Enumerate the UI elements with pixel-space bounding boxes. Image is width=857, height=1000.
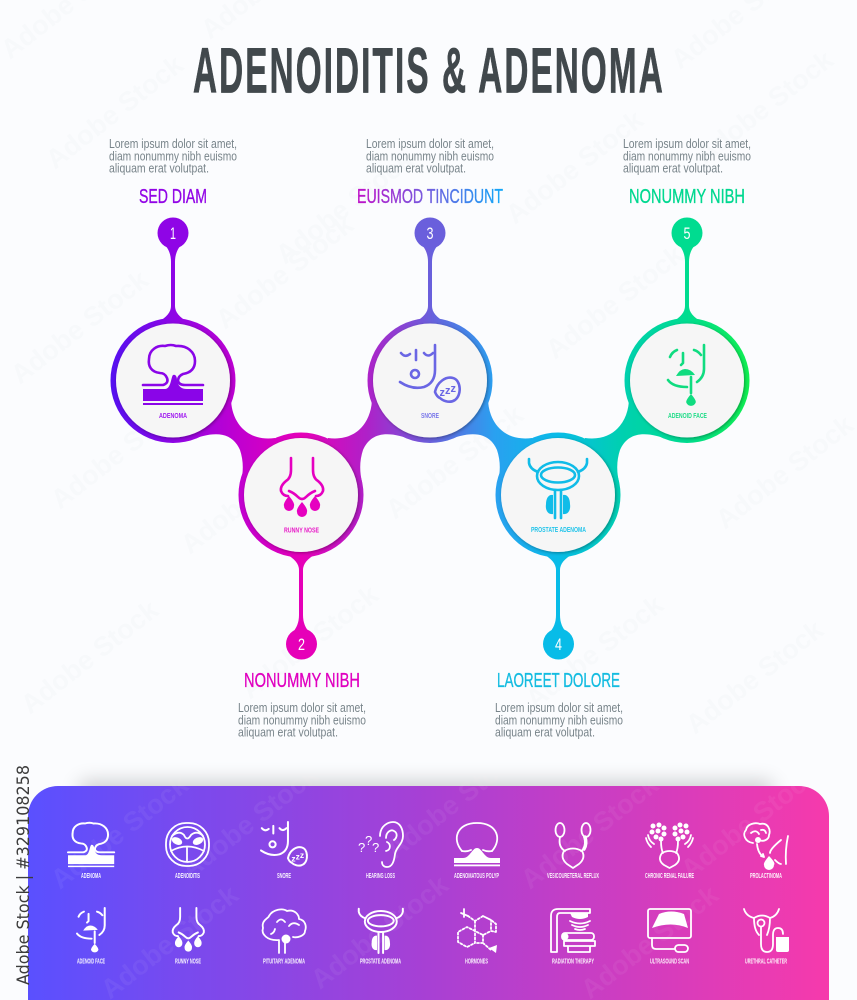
icon: runny nose <box>173 908 204 952</box>
panel: icon set <box>28 786 829 1000</box>
watermark on page: Adobe Stock <box>500 104 650 230</box>
pin 4 <box>543 628 574 660</box>
icon: urethral catheter <box>744 909 789 952</box>
text block 5: Lorem ipsum dolor sit amet, <box>623 136 751 151</box>
step 3: snore <box>373 324 487 438</box>
text block 1: Lorem ipsum dolor sit amet, <box>109 136 237 151</box>
icon: adenoiditis <box>166 823 209 866</box>
watermark on page: Adobe Stock <box>175 434 325 560</box>
icon: radiation therapy <box>551 909 595 952</box>
watermark on panel: Adobe Stock <box>380 739 530 865</box>
watermark on page: Adobe Stock <box>45 389 195 515</box>
pin 4: 4 <box>555 635 562 654</box>
label: snore: SNORE <box>277 873 291 880</box>
icon: prostate adenoma <box>359 909 403 953</box>
text block 2: diam nonummy nibh euismo <box>238 712 366 728</box>
icon: hearing loss: ? <box>358 840 365 855</box>
label: prolactinoma: PROLACTINOMA <box>750 873 782 880</box>
text block 3: diam nonummy nibh euismo <box>366 148 494 164</box>
text block 3: Lorem ipsum dolor sit amet, <box>366 136 494 151</box>
label: ultrasound scan: ULTRASOUND SCAN <box>650 958 689 966</box>
icon: chronic renal failure <box>646 822 693 868</box>
icon: adenoma <box>68 823 114 867</box>
stock id text: Adobe Stock | #329108258 <box>14 765 34 985</box>
icon: ultrasound scan <box>648 909 691 952</box>
text block 4: aliquam erat volutpat. <box>495 724 595 740</box>
text block 2 <box>238 700 366 740</box>
label: adenoma: ADENOMA <box>81 873 101 880</box>
circle <box>373 324 487 438</box>
icon: snore <box>261 822 307 866</box>
watermark on page: Adobe Stock <box>210 209 360 335</box>
step 5: adenoid face <box>630 324 744 438</box>
text block 5 <box>623 136 751 176</box>
icon: adenoid face <box>77 908 105 952</box>
step 1: adenoma <box>116 324 230 438</box>
pin 3 <box>414 218 446 248</box>
pin 3: 3 <box>426 224 434 243</box>
text block 4: Lorem ipsum dolor sit amet, <box>495 700 623 715</box>
heading 3: EUISMOD TINCIDUNT <box>357 186 503 208</box>
watermark on panel: Adobe Stock <box>675 759 825 885</box>
watermark on page: Adobe Stock <box>680 614 830 740</box>
watermark on page: Adobe Stock <box>710 409 857 535</box>
label: RUNNY NOSE <box>284 526 319 534</box>
watermark on panel: Adobe Stock <box>305 869 455 995</box>
watermark on page: Adobe Stock <box>15 594 165 720</box>
text block 2: Lorem ipsum dolor sit amet, <box>238 700 366 715</box>
watermark on panel: Adobe Stock <box>175 759 325 885</box>
label: runny nose: RUNNY NOSE <box>175 958 201 966</box>
watermark on page: Adobe Stock <box>540 239 690 365</box>
label: chronic renal failure: CHRONIC RENAL FAILURE <box>645 873 694 880</box>
timeline ribbon <box>110 244 750 633</box>
watermark on page: Adobe Stock <box>690 44 840 170</box>
text block 3 <box>366 136 494 176</box>
watermark on page: Adobe Stock <box>40 49 190 175</box>
label: ADENOMA <box>159 411 187 420</box>
watermark on page: Adobe Stock <box>520 589 670 715</box>
label: adenoiditis: ADENOIDITIS <box>175 873 200 880</box>
watermark on page: Adobe Stock <box>270 144 420 270</box>
pin 1 <box>158 218 188 248</box>
step 4: prostate adenoma <box>501 438 615 552</box>
watermark on panel: Adobe Stock <box>515 769 665 895</box>
watermark on panel <box>45 739 825 1000</box>
label: adenomatous polyp: ADENOMATOUS POLYP <box>454 873 499 880</box>
watermark on page: Adobe Stock <box>380 399 530 525</box>
heading 1: SED DIAM <box>139 186 207 208</box>
watermark on page <box>0 0 857 740</box>
circle <box>630 324 744 438</box>
text block 5: diam nonummy nibh euismo <box>623 148 751 164</box>
icon: hearing loss: ? <box>372 840 379 855</box>
text block 1: diam nonummy nibh euismo <box>109 148 237 164</box>
text block 2: aliquam erat volutpat. <box>238 724 338 740</box>
icon: hearing loss <box>358 822 403 867</box>
label: hearing loss: HEARING LOSS <box>366 873 395 880</box>
circle <box>244 438 358 552</box>
text block 5: aliquam erat volutpat. <box>623 160 723 176</box>
pin 2: 2 <box>298 635 305 654</box>
icon: adenomatous polyp <box>454 823 500 866</box>
label: urethral catheter: URETHRAL CATHETER <box>745 958 787 966</box>
heading 2: NONUMMY NIBH <box>244 670 360 692</box>
pin 5: 5 <box>684 224 690 243</box>
title: ADENOIDITIS & ADENOMA <box>193 35 665 106</box>
icon: prolactinoma <box>744 823 788 870</box>
panel background <box>28 786 829 1000</box>
icon: runny nose <box>281 458 323 517</box>
icon: snore <box>400 345 460 402</box>
label: PROSTATE ADENOMA <box>531 525 586 534</box>
label: prostate adenoma: PROSTATE ADENOMA <box>360 958 401 966</box>
text block 1: aliquam erat volutpat. <box>109 160 209 176</box>
heading 5: NONUMMY NIBH <box>629 186 745 208</box>
label: ADENOID FACE <box>668 411 707 420</box>
text block 1 <box>109 136 237 176</box>
label: pituitary adenoma: PITUITARY ADENOMA <box>263 958 305 966</box>
watermark on page: Adobe Stock <box>5 264 155 390</box>
text block 3: aliquam erat volutpat. <box>366 160 466 176</box>
label: adenoid face: ADENOID FACE <box>77 958 105 966</box>
heading 4: LAOREET DOLORE <box>497 670 620 692</box>
icon: adenoid face <box>668 345 704 406</box>
panel shadow <box>80 782 772 806</box>
icon: prostate <box>529 459 587 518</box>
circle <box>116 324 230 438</box>
watermark on page: Adobe Stock <box>235 579 385 705</box>
pin 2 <box>286 628 317 660</box>
icon: vesicoureteral reflux <box>556 823 590 868</box>
icon: adenoma <box>143 345 203 405</box>
icon: pituitary adenoma <box>263 909 306 953</box>
label: hormones: HORMONES <box>465 958 488 966</box>
watermark on panel: Adobe Stock <box>45 769 195 895</box>
icon: hearing loss: ? <box>365 833 372 848</box>
circle <box>501 438 615 552</box>
text block 4: diam nonummy nibh euismo <box>495 712 623 728</box>
text block 4 <box>495 700 623 740</box>
pin 1: 1 <box>170 224 176 243</box>
step 2: runny nose <box>244 438 358 552</box>
icon: hormones <box>458 909 497 953</box>
pin 5 <box>672 218 702 248</box>
label: radiation therapy: RADIATION THERAPY <box>552 958 594 966</box>
label: SNORE <box>421 411 439 420</box>
label: vesicoureteral reflux: VESICOURETERAL REFLUX <box>547 873 599 880</box>
